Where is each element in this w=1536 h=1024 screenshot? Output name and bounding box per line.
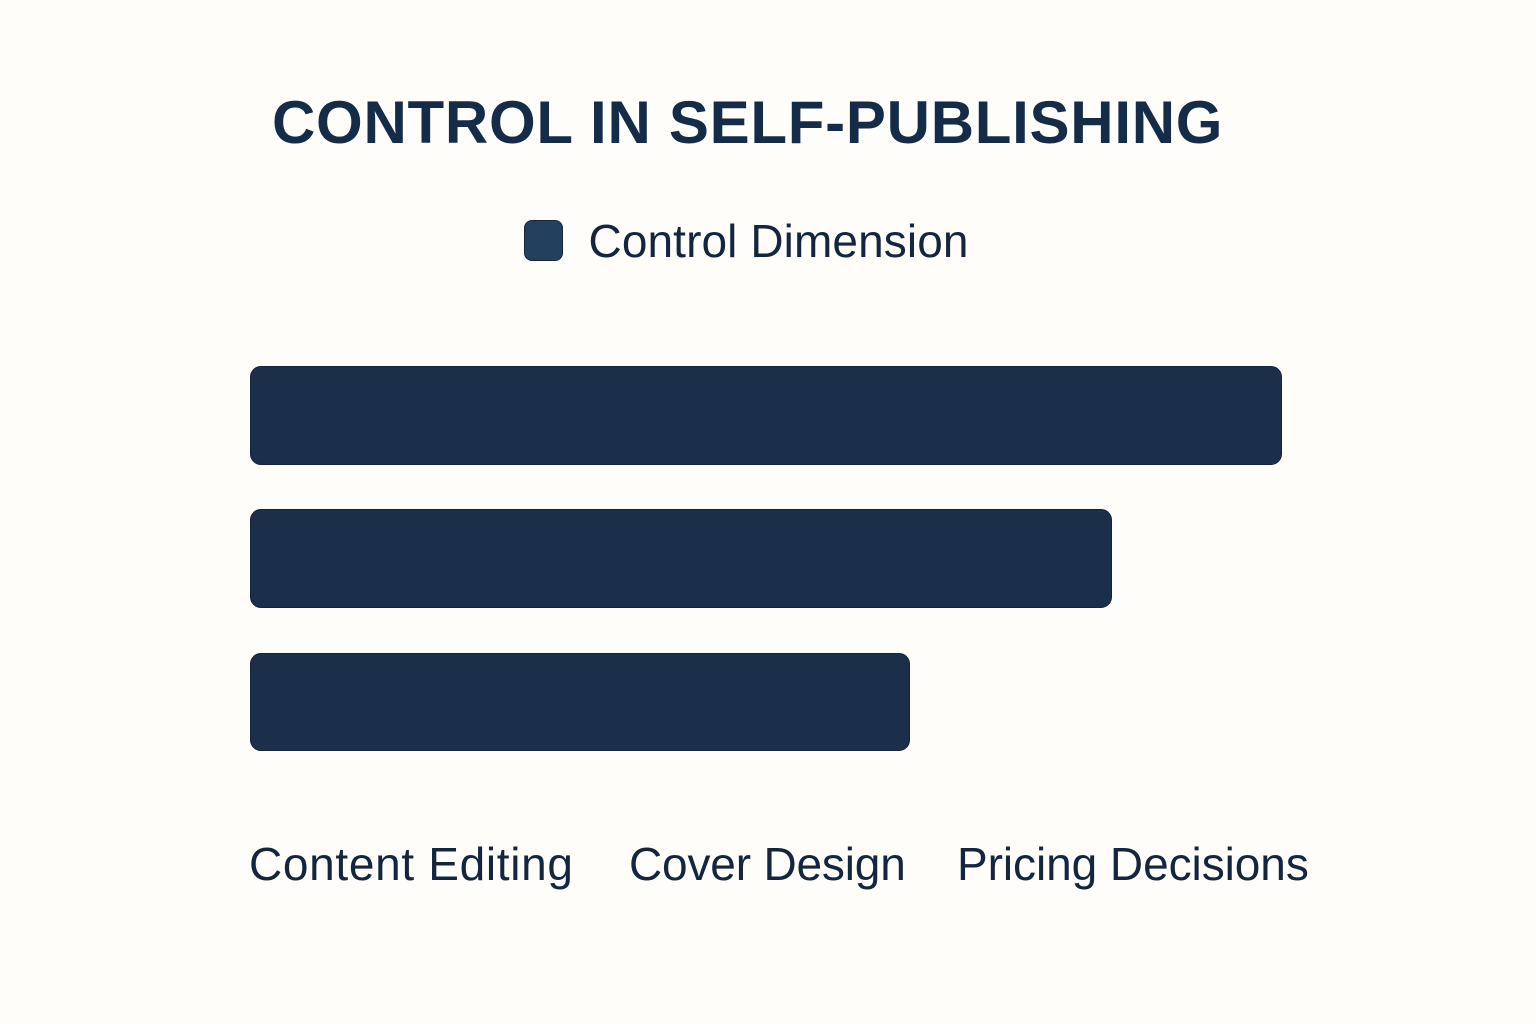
label: content editing: Content Editing	[249, 838, 574, 890]
bar: pricing decisions	[250, 652, 910, 751]
bar chart	[250, 366, 1282, 751]
category labels	[249, 838, 1309, 890]
legend label: Control Dimension	[588, 215, 969, 267]
legend swatch	[524, 220, 563, 261]
bar: cover design	[250, 509, 1112, 608]
bar: content editing	[250, 366, 1282, 464]
legend	[524, 215, 969, 267]
label: cover design: Cover Design	[629, 838, 906, 890]
label: pricing decisions: Pricing Decisions	[957, 838, 1309, 890]
title: CONTROL IN SELF-PUBLISHING	[272, 89, 1223, 156]
